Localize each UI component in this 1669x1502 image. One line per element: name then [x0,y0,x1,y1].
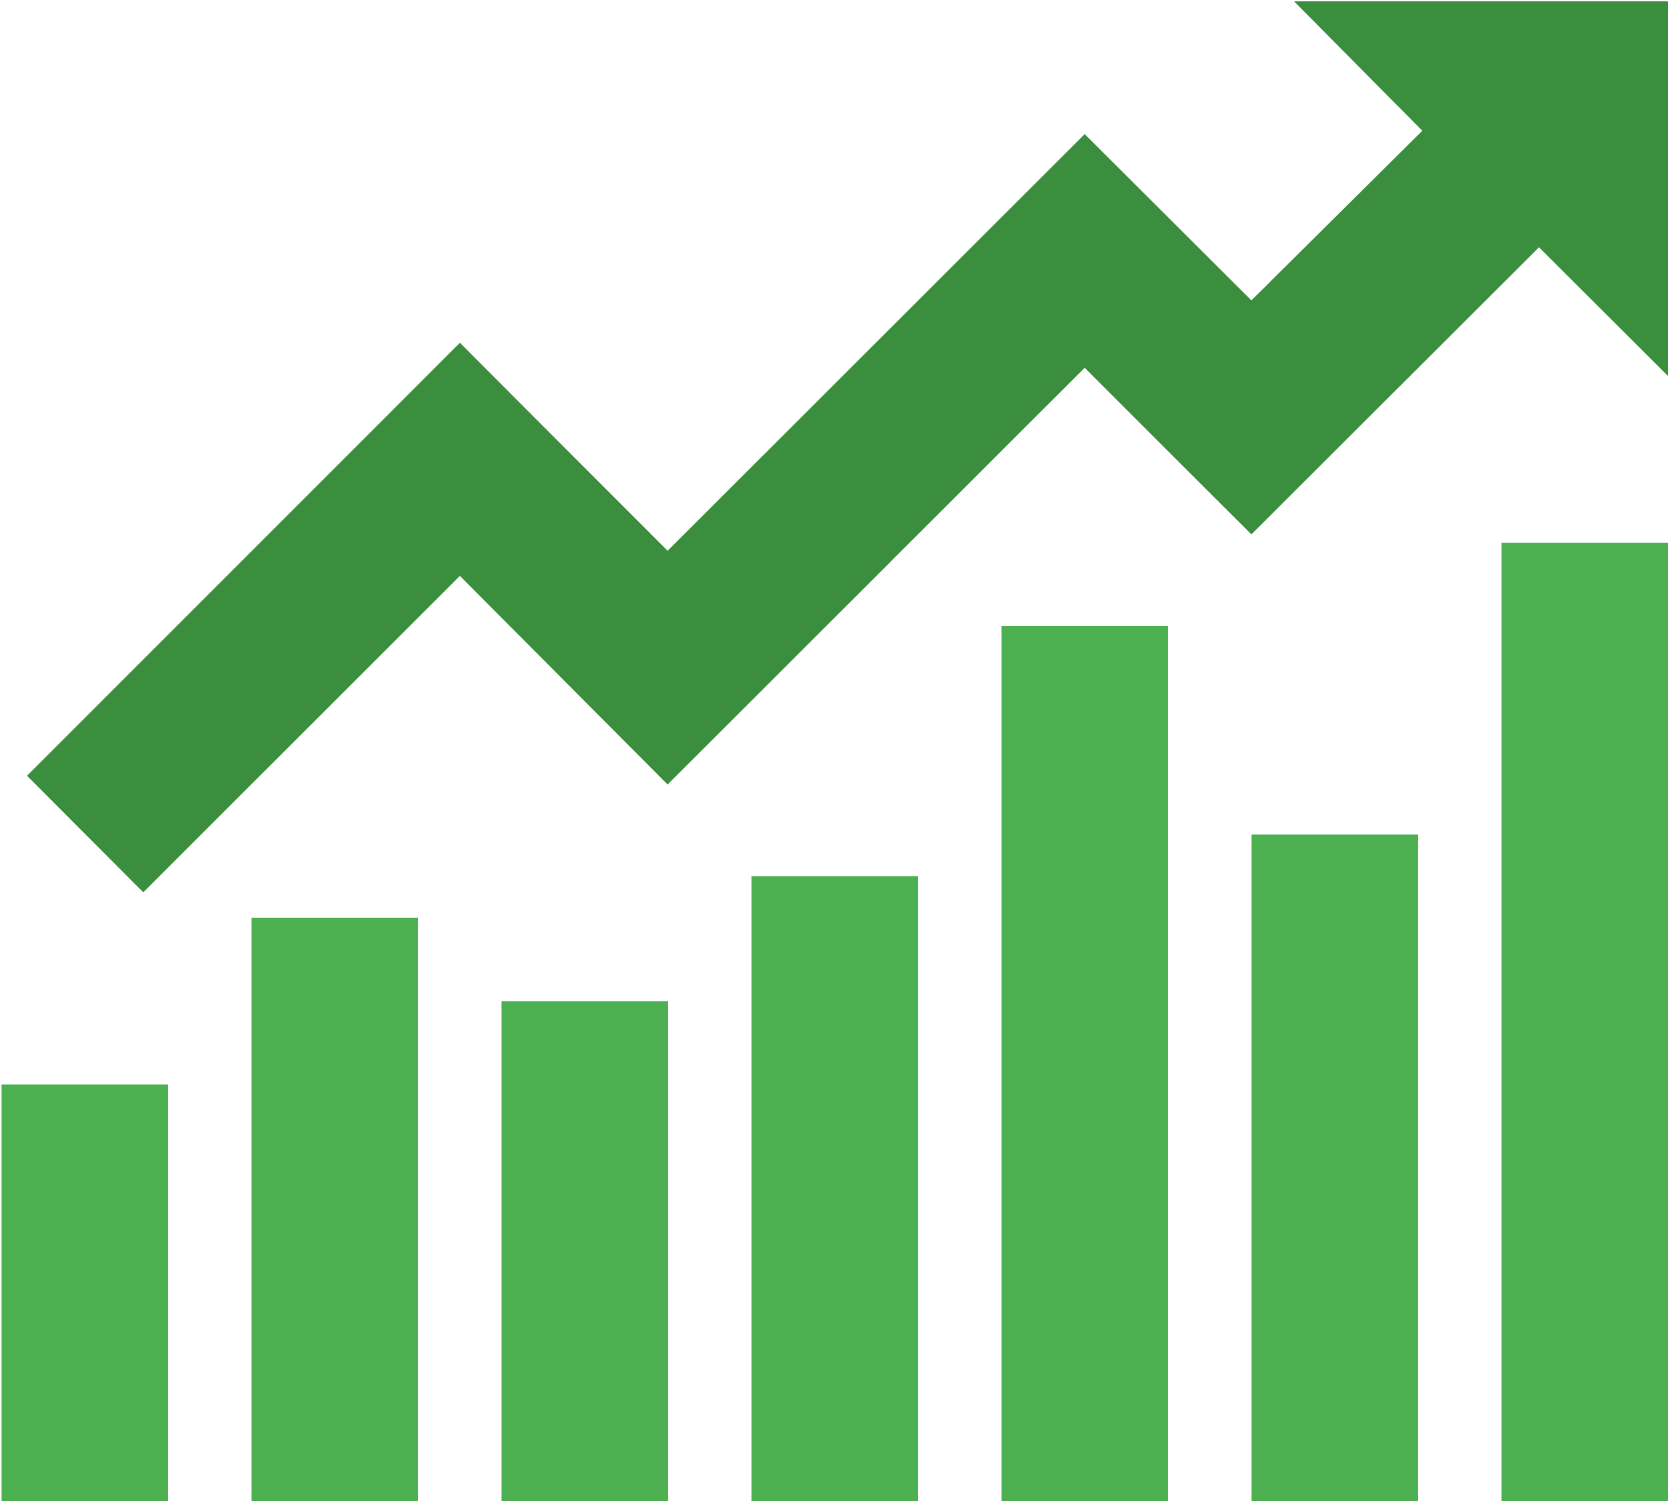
bar 3 [502,1001,668,1501]
bar 2 [252,918,418,1501]
bar 6 [1252,834,1418,1501]
bar 4 [752,876,918,1501]
arrow: rising zigzag trend line [27,1,1668,892]
bar chart [2,543,1668,1501]
bar 1 [2,1084,168,1501]
bar 7 [1502,543,1668,1501]
bar 5 [1002,626,1168,1501]
